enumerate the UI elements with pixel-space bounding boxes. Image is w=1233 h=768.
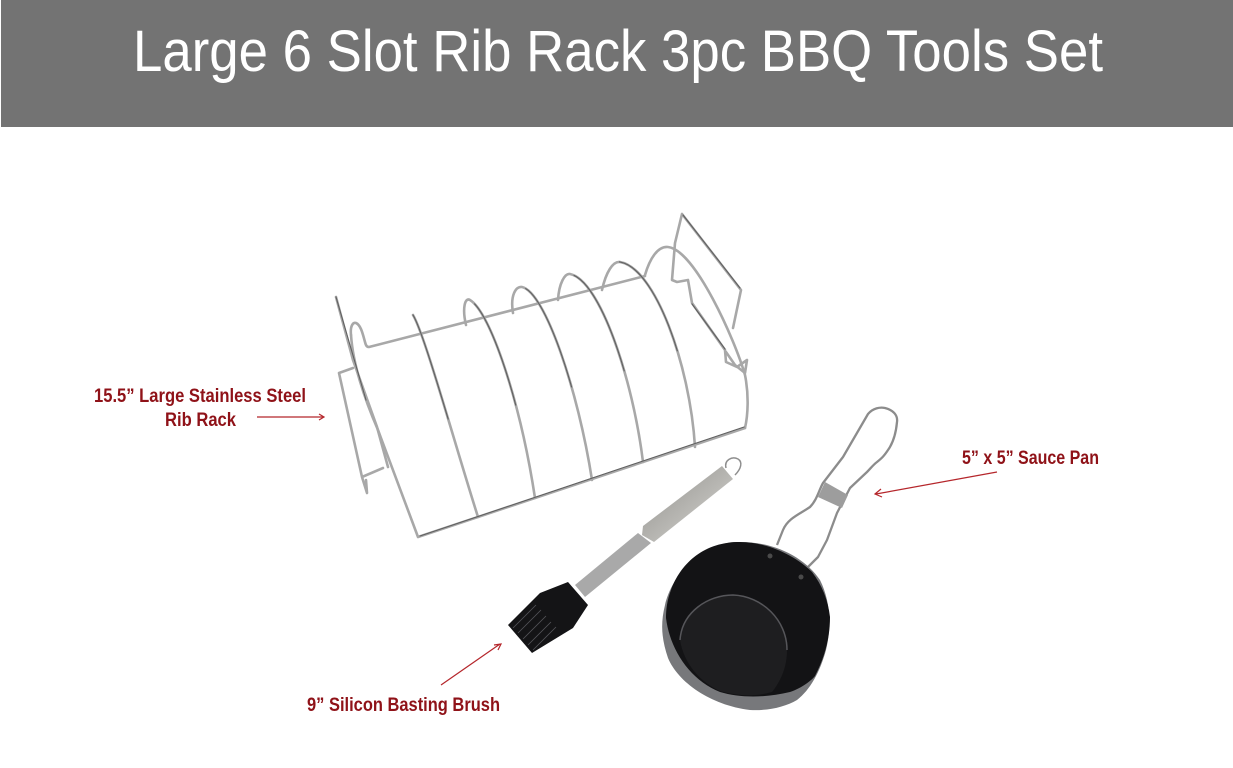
- brush grip: [642, 466, 733, 542]
- pan base: [680, 595, 787, 695]
- pan rivets: [768, 554, 772, 558]
- arrow to basting brush: [441, 644, 501, 685]
- brush head: [508, 582, 588, 653]
- pan body: [662, 542, 829, 710]
- arrow to rib rack: [257, 414, 324, 420]
- callout: sauce pan: 5” x 5” Sauce Pan: [962, 448, 1099, 469]
- callout: rib rack: [94, 386, 324, 431]
- brush handle ring: [726, 458, 741, 475]
- callout: rib rack: Rib Rack: [165, 410, 236, 431]
- illustration: basting brush: [508, 458, 741, 653]
- callout: sauce pan: [875, 448, 1099, 497]
- callout: basting brush: [307, 644, 501, 716]
- callout: basting brush: 9” Silicon Basting Brush: [307, 695, 500, 716]
- pan handle: [777, 408, 897, 568]
- callout: rib rack: 15.5” Large Stainless Steel: [94, 386, 306, 407]
- arrow to sauce pan: [875, 472, 997, 497]
- title banner: [1, 0, 1233, 127]
- illustration: rib rack: [336, 214, 748, 537]
- pan handle clip: [818, 482, 848, 508]
- pan interior: [666, 542, 830, 696]
- illustration: sauce pan: [662, 408, 897, 710]
- brush shaft: [575, 533, 651, 597]
- title: Large 6 Slot Rib Rack 3pc BBQ Tools Set: [133, 19, 1103, 84]
